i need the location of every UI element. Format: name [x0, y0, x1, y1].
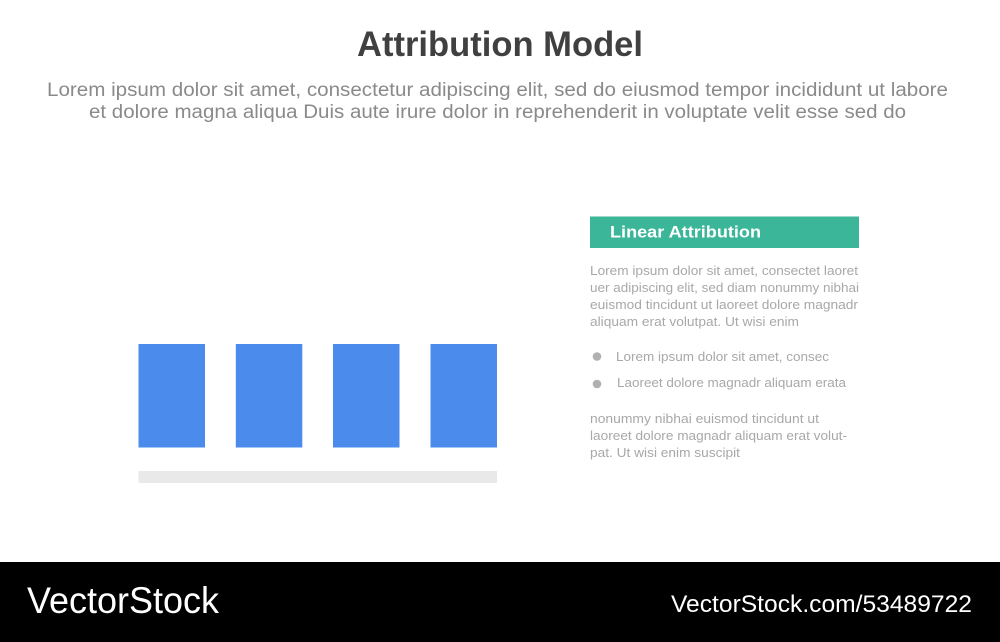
- bar 2: [236, 344, 302, 448]
- footer band: [0, 562, 1000, 642]
- paragraph bottom: laoreet dolore magnadr aliquam erat volut-: [590, 428, 847, 443]
- subtitle text block: [47, 80, 948, 123]
- paragraph top: Lorem ipsum dolor sit amet, consectet laoret: [590, 263, 858, 278]
- subtitle text block: et dolore magna aliqua Duis aute irure dolor in reprehenderit in voluptate velit esse sed do: [89, 102, 906, 123]
- bar 4: [430, 344, 497, 448]
- paragraph top: uer adipiscing elit, sed diam nonummy nibhai: [590, 280, 859, 295]
- paragraph bottom: [590, 411, 847, 460]
- paragraph top: aliquam erat volutpat. Ut wisi enim: [590, 314, 799, 329]
- heading banner: Linear Attribution: [610, 222, 761, 242]
- title: Attribution Model: [357, 25, 643, 64]
- footer logo text: VectorStock: [27, 580, 219, 621]
- heading banner: [590, 216, 859, 248]
- bar 1: [138, 344, 205, 448]
- footer url text: VectorStock.com/53489722: [671, 591, 972, 618]
- paragraph top: euismod tincidunt ut laoreet dolore magnadr: [590, 297, 859, 312]
- panel: linear attribution: [590, 216, 859, 460]
- subtitle text block: Lorem ipsum dolor sit amet, consectetur adipiscing elit, sed do eiusmod tempor incididunt ut labore: [47, 80, 948, 101]
- paragraph bottom: nonummy nibhai euismod tincidunt ut: [590, 411, 819, 426]
- bar 3: [333, 344, 400, 448]
- bullet item 2: Laoreet dolore magnadr aliquam erata: [617, 375, 847, 390]
- paragraph top: [590, 263, 859, 329]
- baseline bar: [138, 471, 497, 483]
- paragraph bottom: pat. Ut wisi enim suscipit: [590, 445, 740, 460]
- bar chart: linear attribution: [138, 344, 497, 483]
- bullet item 1: Lorem ipsum dolor sit amet, consec: [616, 349, 830, 364]
